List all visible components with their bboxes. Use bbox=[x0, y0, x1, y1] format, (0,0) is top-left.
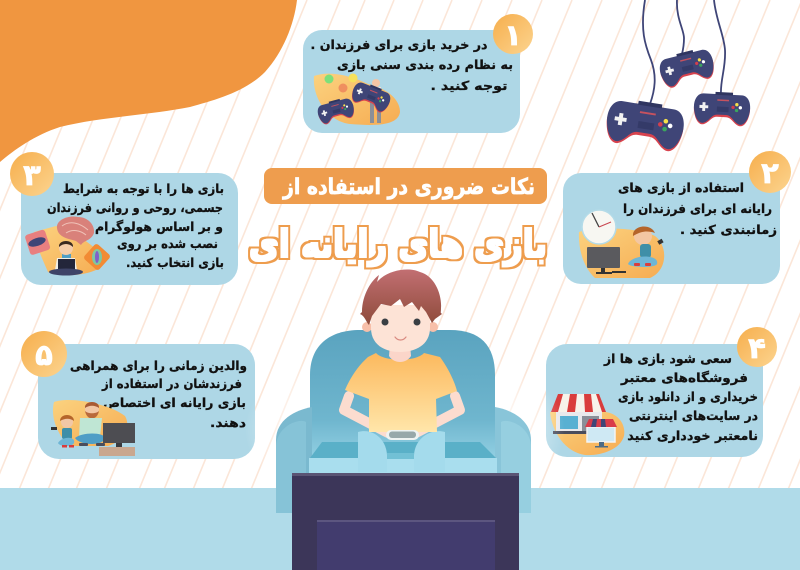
face bbox=[371, 305, 430, 352]
game controller bbox=[386, 430, 419, 440]
badge 5 bbox=[21, 331, 67, 377]
card 3 bbox=[10, 152, 238, 285]
badge 4: ۴ bbox=[748, 331, 766, 365]
right controller with cable bbox=[693, 0, 751, 127]
light glow bbox=[245, 340, 565, 520]
hanging game controllers bbox=[603, 0, 751, 153]
orange corner shape bbox=[0, 0, 297, 162]
card 4 bbox=[546, 327, 777, 457]
legs bbox=[358, 431, 445, 472]
badge 4 bbox=[737, 327, 777, 367]
illustration: father and child at computer bbox=[51, 400, 135, 456]
card 2 text: رایانه ای برای فرزندان را bbox=[623, 201, 772, 216]
arms bbox=[344, 396, 460, 433]
card 1 bbox=[303, 14, 533, 133]
card 4 text: فروشگاه‌های معتبر bbox=[620, 370, 748, 385]
eyes bbox=[382, 318, 420, 326]
card 5 bbox=[21, 331, 255, 459]
hair bbox=[360, 269, 442, 325]
badge 2: ۲ bbox=[761, 156, 779, 190]
card 2 text bbox=[618, 180, 777, 237]
card 3 text: بازی ها را با توجه به شرایط bbox=[63, 181, 224, 196]
shirt bbox=[345, 353, 457, 432]
illustration: boy, clock, monitor bbox=[579, 210, 664, 278]
card 3 text: نصب شده بر روی bbox=[117, 236, 218, 251]
card 4 text: خریداری و از دانلود بازی bbox=[618, 389, 758, 404]
main title: بازی های رایانه ای bbox=[249, 222, 547, 266]
illustration: boy, brain, game tiles bbox=[24, 217, 111, 276]
middle controller with cable bbox=[657, 0, 717, 90]
card 4 text bbox=[603, 351, 758, 443]
card 3 text: جسمی، روحی و روانی فرزندان bbox=[47, 200, 223, 215]
illustration: online shop bbox=[550, 394, 624, 455]
floor band bbox=[0, 488, 800, 570]
card 2 bbox=[563, 151, 791, 284]
card 4 text: سعی شود بازی ها از bbox=[603, 351, 732, 366]
badge 1: ۱ bbox=[504, 18, 522, 52]
card 3 text: بازی انتخاب کنید. bbox=[126, 255, 224, 270]
badge 2 bbox=[749, 151, 791, 193]
card 1 text: به نظام رده بندی سنی بازی bbox=[337, 57, 513, 73]
card 5 text: بازی رایانه ای اختصاص bbox=[103, 395, 246, 410]
card 5 text bbox=[70, 358, 247, 430]
badge 3 bbox=[10, 152, 54, 196]
boy on sofa playing bbox=[245, 269, 565, 520]
illustration: players with controllers bbox=[314, 74, 400, 126]
card 1 text: توجه کنید . bbox=[430, 78, 508, 93]
card 5 text: فرزندشان در استفاده از bbox=[101, 376, 242, 391]
badge 3: ۳ bbox=[23, 158, 41, 192]
big controller with cable bbox=[603, 0, 687, 153]
card 4 text: در سایت‌های اینترنتی bbox=[629, 408, 758, 423]
card 2 text: استفاده از بازی های bbox=[618, 180, 744, 195]
title banner: نکات ضروری در استفاده از bbox=[282, 175, 535, 200]
card 5 text: والدین زمانی را برای همراهی bbox=[70, 358, 247, 373]
smile bbox=[395, 337, 406, 340]
card 3 text bbox=[47, 181, 224, 270]
card 1 text: در خرید بازی برای فرزندان . bbox=[310, 37, 488, 52]
card 5 text: دهند. bbox=[210, 415, 246, 430]
card 1 text bbox=[310, 37, 513, 93]
neck bbox=[389, 344, 411, 362]
badge 5: ۵ bbox=[35, 338, 53, 372]
card 4 text: نامعتبر خودداری کنید . bbox=[618, 428, 758, 443]
title banner bbox=[264, 168, 547, 204]
card 3 text: و بر اساس هولوگرام bbox=[95, 219, 223, 235]
monitor back bbox=[292, 473, 519, 570]
badge 1 bbox=[493, 14, 533, 54]
card 2 text: زمانبندی کنید . bbox=[680, 222, 777, 237]
sofa bbox=[276, 330, 531, 513]
ears bbox=[362, 322, 438, 332]
